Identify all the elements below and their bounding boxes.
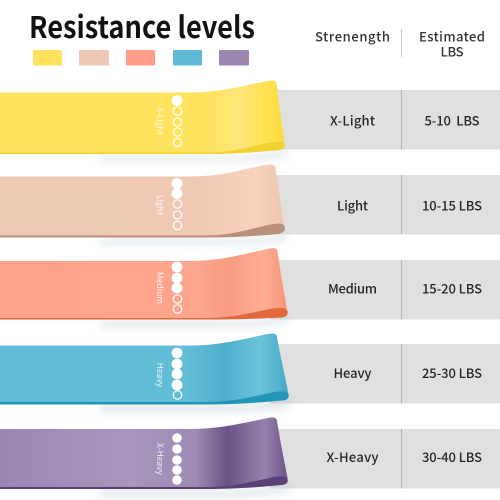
table row: X-Heavy [270,429,500,488]
band label: X-Light [154,107,166,136]
band label: Heavy [154,363,166,388]
table row: Light: Light [337,196,368,214]
column heading: strength: Strenength [315,26,390,46]
band: X-Heavy purple [0,418,290,497]
strength dots [172,179,182,230]
band label: Light [154,195,166,216]
band label: X-Heavy [154,443,166,476]
table row: X-Light: 5-10 LBS [424,110,480,130]
table row: Heavy [270,344,500,404]
table row: Medium: Medium [328,278,377,298]
strength dots [172,433,182,485]
table row: Medium: 15-20 LBS [422,278,482,298]
band: Light peach [0,164,287,245]
table row: Medium [270,260,500,320]
colour legend swatches [33,50,249,66]
band: Medium orange [0,248,289,328]
band: X-Light yellow [0,81,287,161]
table row: Heavy: Heavy [334,363,372,382]
table header [315,26,485,60]
strength dots [172,96,182,147]
table row: Light: 10-15 LBS [422,196,482,214]
column heading: estimated: Estimated [419,26,485,46]
table row: X-Heavy: X-Heavy [326,447,378,466]
strength dots [172,348,182,399]
table row: Heavy: 25-30 LBS [422,363,482,382]
table row: X-Light: X-Light [330,110,375,130]
title: Resistance levels [29,3,255,47]
band: Heavy blue [0,334,290,412]
table row: Light [270,175,500,234]
column heading: lbs: LBS [440,42,464,60]
table row: X-Heavy: 30-40 LBS [422,447,482,466]
table row: X-Light [270,90,500,150]
strength dots [172,262,182,313]
band label: Medium [154,272,166,304]
